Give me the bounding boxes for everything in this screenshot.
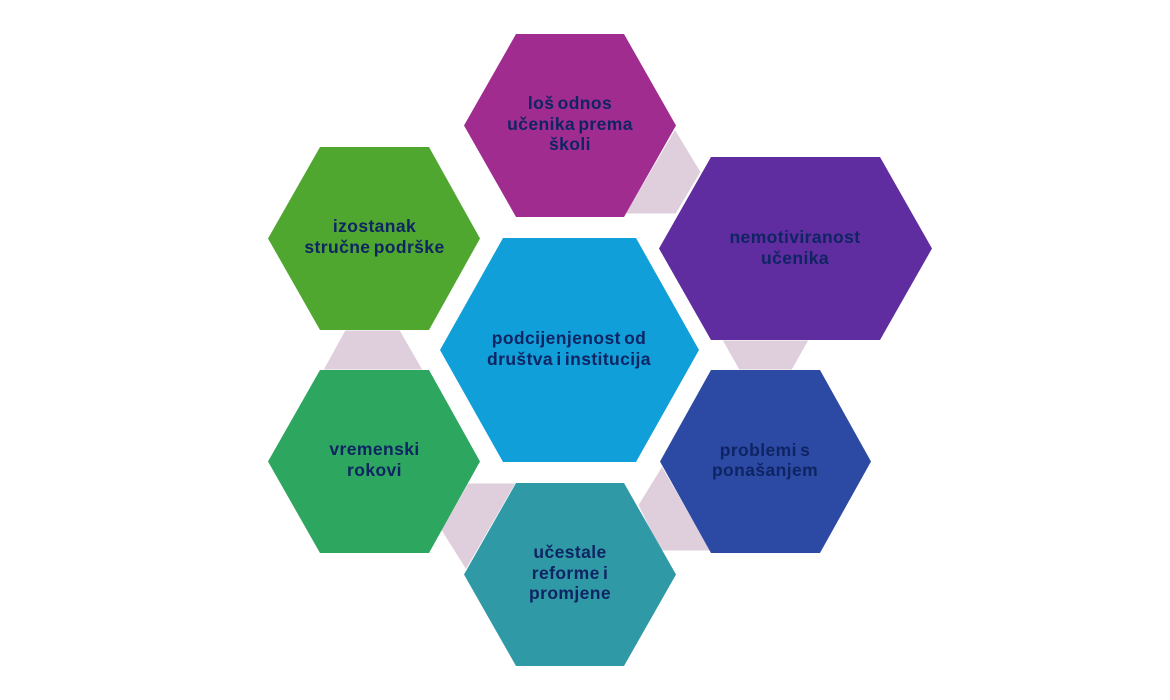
hexagon: problemi s ponašanjem: problemi s [720, 440, 810, 460]
connector: top to right [625, 129, 701, 214]
connector: right to lower right [722, 340, 809, 370]
hexagon: izostanak stručne podrške [268, 147, 480, 330]
hexagon: vremenski rokovi: rokovi [347, 460, 402, 480]
hexagon: učestale reforme: učestale [533, 542, 607, 562]
hexagon: nemotiviranost: nemotiviranost [729, 227, 861, 247]
hexagon: vremenski rokovi: vremenski [329, 439, 420, 459]
connector: bottom to lower left [441, 483, 516, 570]
hexagon: loš odnos [464, 34, 676, 217]
hexagon: nemotiviranost: učenika [761, 248, 829, 268]
hexagon: problemi s ponašanjem: ponašanjem [712, 460, 818, 480]
hexagon: loš odnos: školi [549, 134, 591, 154]
hexagon: loš odnos: loš odnos [528, 93, 612, 113]
center hexagon: podcijenjenost [440, 238, 699, 462]
hexagon: učestale reforme: reforme i [532, 563, 608, 583]
connector: lower right to bottom [638, 466, 711, 551]
hexagon: problemi s ponašanjem [660, 370, 871, 553]
hexagon: vremenski rokovi [268, 370, 480, 553]
hexagon: učestale reforme [464, 483, 676, 666]
center hexagon: podcijenjenost: podcijenjenost od [492, 328, 646, 348]
connector: lower left to upper left [323, 330, 423, 370]
hexagon: nemotiviranost [659, 157, 932, 340]
center hexagon: podcijenjenost: društva i institucija [487, 349, 651, 369]
hexagon: loš odnos: učenika prema [507, 114, 633, 134]
hexagon: izostanak stručne podrške: izostanak [333, 216, 416, 236]
hexagon: izostanak stručne podrške: stručne podrške [304, 237, 445, 257]
hexagon: učestale reforme: promjene [529, 583, 611, 603]
